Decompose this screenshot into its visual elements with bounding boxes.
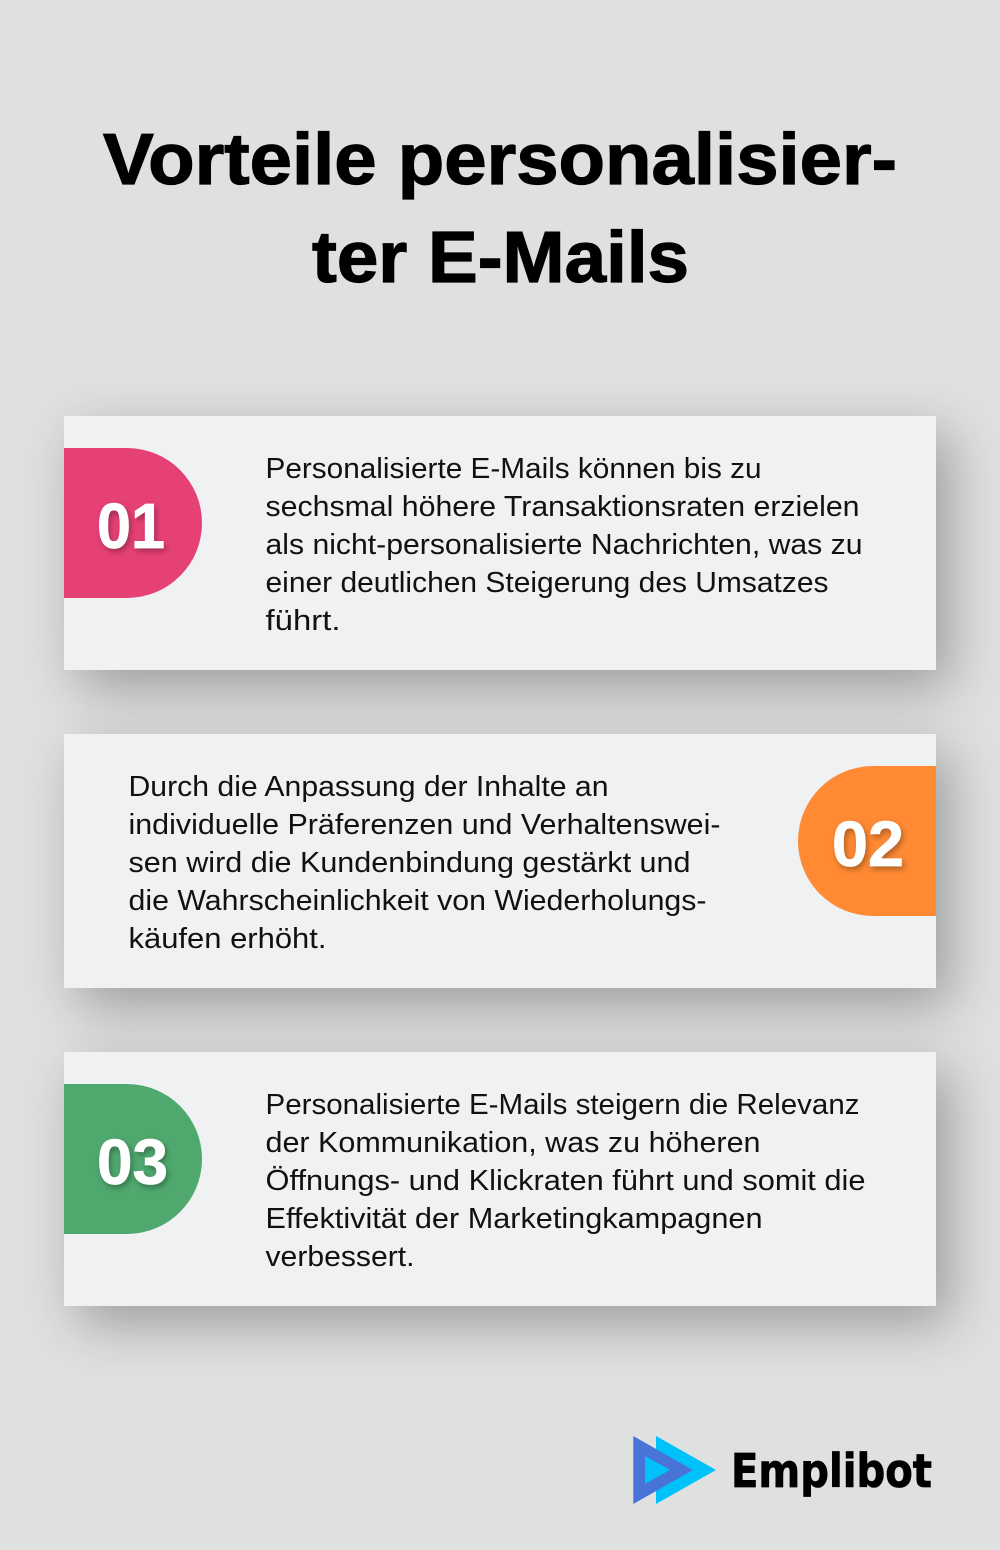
title <box>102 120 897 298</box>
text block: benefit 03: Personalisierte E-Mails steigern die Relevanz <box>266 1089 859 1121</box>
logo: Emplibot: Emplibot <box>731 1444 932 1498</box>
text block: benefit 02: die Wahrscheinlichkeit von Wiederholungs- <box>128 885 706 917</box>
logo: Emplibot <box>633 1436 932 1504</box>
text block: benefit 02: Durch die Anpassung der Inhalte an <box>128 771 608 803</box>
text block: benefit 02: sen wird die Kundenbindung gestärkt und <box>128 847 690 879</box>
badge: 02 <box>798 766 936 916</box>
badge: 03: 03 <box>97 1126 168 1198</box>
text block: benefit 01: Personalisierte E-Mails können bis zu <box>266 453 762 485</box>
panel: benefit 01 <box>64 416 936 670</box>
text block: benefit 03: Effektivität der Marketingkampagnen <box>266 1203 762 1235</box>
text block: benefit 01: als nicht-personalisierte Nachrichten, was zu <box>266 529 862 561</box>
badge: 03 <box>64 1084 202 1234</box>
badge: 01 <box>64 448 202 598</box>
text block: benefit 01 <box>266 453 862 637</box>
text block: benefit 03 <box>266 1089 866 1273</box>
title: Vorteile personalisier- <box>103 120 897 200</box>
text block: benefit 02: käufen erhöht. <box>128 923 326 955</box>
text block: benefit 03: der Kommunikation, was zu höheren <box>266 1127 760 1159</box>
text block: benefit 01: führt. <box>266 605 340 637</box>
text block: benefit 02: individuelle Präferenzen und Verhaltenswei- <box>128 809 720 841</box>
badge: 01: 01 <box>97 490 165 562</box>
text block: benefit 03: verbessert. <box>266 1241 414 1273</box>
text block: benefit 02 <box>128 771 720 955</box>
text block: benefit 01: sechsmal höhere Transaktionsraten erzielen <box>266 491 860 523</box>
panel: benefit 02 <box>64 734 936 988</box>
text block: benefit 01: einer deutlichen Steigerung des Umsatzes <box>266 567 828 599</box>
panel: benefit 03 <box>64 1052 936 1306</box>
text block: benefit 03: Öffnungs- und Klickraten führt und somit die <box>266 1165 866 1197</box>
badge: 02: 02 <box>832 808 904 880</box>
title: ter E-Mails <box>312 218 689 298</box>
